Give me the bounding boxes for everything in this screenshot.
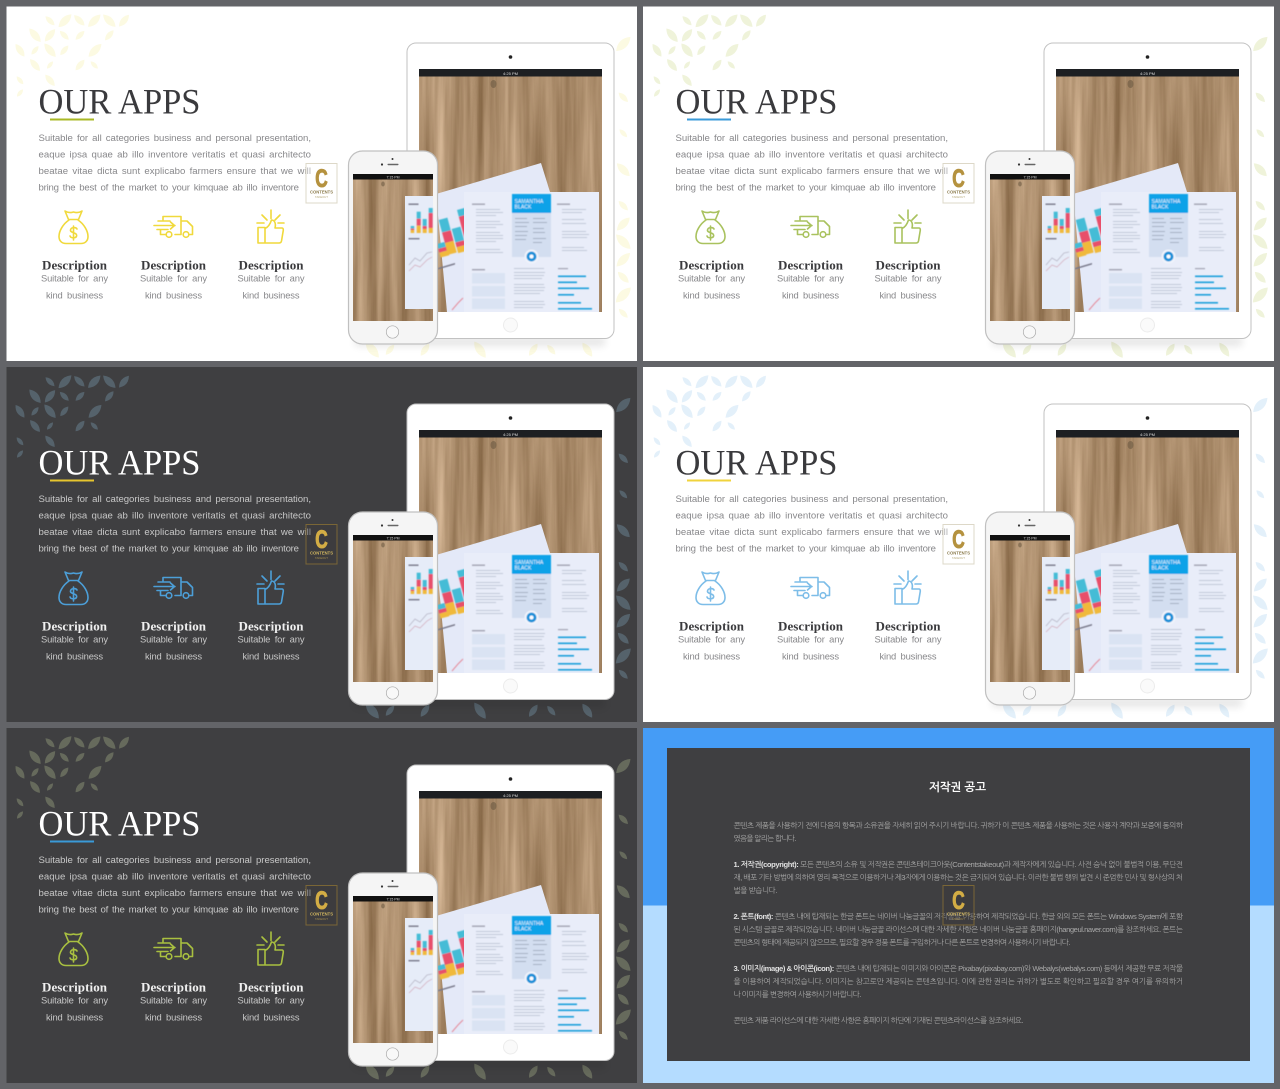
tablet and phone mockup bbox=[986, 404, 1251, 707]
body text: eaque ipsa quae ab illo inventore veritatis et quasi architecto bbox=[38, 150, 311, 160]
feature: description 3: Description bbox=[238, 258, 304, 272]
feature: description 3 bbox=[238, 618, 305, 662]
icon: money bag bbox=[696, 572, 725, 604]
feature: description 2: Description bbox=[141, 980, 207, 994]
feature: description 2: kind business bbox=[145, 650, 202, 662]
feature: description 1 bbox=[41, 258, 108, 300]
panel: copyright notice bbox=[643, 728, 1274, 1083]
icon: money bag bbox=[59, 572, 88, 604]
panel: blue dark slide bbox=[6, 367, 637, 722]
feature: description 1: kind business bbox=[46, 290, 103, 300]
feature: description 2 bbox=[777, 258, 844, 300]
feature: description 1: kind business bbox=[683, 650, 740, 662]
tablet and phone mockup bbox=[348, 765, 614, 1068]
body text: Suitable for all categories business and personal presentation, bbox=[676, 494, 948, 505]
notice clause: copyright bbox=[734, 860, 1183, 895]
feature: description 1 bbox=[678, 258, 745, 300]
feature: description 3 bbox=[238, 980, 305, 1022]
notice intro bbox=[734, 821, 1184, 843]
feature: description 3: Description bbox=[238, 980, 304, 994]
icon: thumbs up bbox=[257, 932, 284, 965]
watermark logo bbox=[306, 524, 337, 564]
panel: yellow light slide bbox=[6, 6, 637, 361]
notice clause: image and icon bbox=[734, 964, 1183, 999]
icon: delivery truck bbox=[154, 578, 192, 598]
feature: description 3: kind business bbox=[242, 650, 300, 662]
watermark logo bbox=[943, 524, 974, 564]
feature: description 1: Suitable for any bbox=[41, 994, 108, 1006]
leaf pattern bbox=[13, 373, 634, 721]
icon: delivery truck bbox=[154, 216, 192, 237]
leaf pattern bbox=[13, 12, 634, 360]
notice clause: copyright: 벌을 받습니다. bbox=[734, 886, 778, 895]
heading underline bbox=[50, 840, 94, 842]
feature: description 3: Suitable for any bbox=[238, 634, 305, 644]
watermark logo bbox=[306, 164, 337, 203]
leaf pattern bbox=[650, 373, 1271, 721]
body text: beatae vitae dicta sunt explicabo farmers ensure that we will bbox=[38, 166, 311, 177]
feature: description 1: Description bbox=[42, 258, 108, 272]
feature: description 2: kind business bbox=[782, 650, 839, 662]
feature: description 2: kind business bbox=[145, 1012, 202, 1022]
icon: thumbs up bbox=[257, 571, 284, 604]
feature: description 3 bbox=[874, 258, 942, 300]
tablet and phone mockup bbox=[348, 404, 614, 707]
body text: Suitable for all categories business and personal presentation, bbox=[38, 855, 311, 866]
feature: description 2 bbox=[140, 980, 207, 1022]
feature: description 2: kind business bbox=[782, 290, 839, 300]
feature: description 1 bbox=[41, 618, 108, 662]
feature: description 2: kind business bbox=[145, 290, 202, 300]
body text: eaque ipsa quae ab illo inventore veritatis et quasi architecto bbox=[38, 510, 311, 522]
feature: description 2: Suitable for any bbox=[140, 634, 207, 644]
feature: description 2 bbox=[140, 618, 207, 662]
heading: OUR APPS bbox=[676, 82, 838, 122]
feature: description 1: Suitable for any bbox=[41, 272, 108, 284]
body text: beatae vitae dicta sunt explicabo farmers ensure that we will bbox=[38, 888, 311, 899]
notice clause: font: 콘텐츠의 형태에 제공되지 않으므로, 필요할 경우 정품 폰트를 구입하거나 다른 폰트로 변경하여 사용하시기 바랍니다. bbox=[734, 938, 1070, 947]
feature: description 2: Suitable for any bbox=[140, 272, 207, 284]
panel: green light slide bbox=[643, 6, 1274, 361]
feature: description 1: Suitable for any bbox=[678, 634, 745, 644]
tablet and phone mockup bbox=[348, 43, 614, 346]
heading: OUR APPS bbox=[676, 442, 838, 482]
feature: description 1: Description bbox=[679, 258, 745, 272]
watermark logo bbox=[306, 886, 337, 925]
feature: description 3: Description bbox=[238, 618, 304, 634]
icon: money bag bbox=[59, 933, 88, 966]
notice title: 저작권 공고 bbox=[929, 781, 986, 794]
body text bbox=[676, 494, 948, 554]
icon: thumbs up bbox=[894, 210, 921, 243]
heading: OUR APPS bbox=[38, 82, 200, 122]
notice intro: 였음을 알리는 합니다. bbox=[734, 834, 796, 843]
feature: description 2: Suitable for any bbox=[140, 994, 207, 1006]
body text: bring the best of the market to your kimquae ab illo inventore bbox=[38, 544, 299, 554]
icon: delivery truck bbox=[791, 216, 830, 237]
notice clause: copyright: 1. 저작권(copyright): 모든 콘텐츠의 소유 및 저작권은 콘텐츠테이크아웃(Contentstakeout)과 제작자에게 있습니다. 사전 승낙 없이 불법적 이용, 무단전 bbox=[734, 860, 1183, 869]
body text: Suitable for all categories business and personal presentation, bbox=[38, 133, 311, 144]
feature: description 2: Description bbox=[778, 618, 844, 634]
heading underline bbox=[687, 480, 731, 482]
feature: description 3 bbox=[874, 618, 942, 662]
feature: description 3: kind business bbox=[242, 1012, 300, 1022]
body text bbox=[38, 133, 311, 194]
body text: Suitable for all categories business and personal presentation, bbox=[676, 133, 948, 144]
notice clause: font: 된 시스템 글꼴로 제작되었습니다. 네이버 나눔글꼴 라이선스에 대한 자세한 사항은 네이버 나눔글꼴 홈페이지(hangeul.naver.com)를 참조하세요. 폰트는 bbox=[734, 925, 1183, 934]
body text: beatae vitae dicta sunt explicabo farmers ensure that we will bbox=[676, 166, 948, 177]
leaf pattern bbox=[13, 734, 634, 1082]
body text: eaque ipsa quae ab illo inventore veritatis et quasi architecto bbox=[38, 872, 311, 882]
feature: description 3: Description bbox=[876, 618, 941, 634]
feature: description 3 bbox=[238, 258, 305, 300]
feature: description 1: kind business bbox=[683, 290, 740, 300]
panel: green dark slide bbox=[6, 728, 637, 1083]
notice clause: font bbox=[734, 912, 1184, 947]
body text bbox=[38, 494, 311, 554]
feature: description 1 bbox=[41, 980, 108, 1022]
feature: description 3: kind business bbox=[242, 290, 300, 300]
feature: description 3: Suitable for any bbox=[874, 634, 942, 644]
tablet and phone mockup bbox=[986, 43, 1251, 346]
leaf pattern bbox=[650, 12, 1271, 360]
body text: eaque ipsa quae ab illo inventore veritatis et quasi architecto bbox=[676, 510, 948, 522]
body text: beatae vitae dicta sunt explicabo farmers ensure that we will bbox=[38, 527, 311, 538]
heading underline bbox=[50, 118, 94, 120]
feature: description 2: Suitable for any bbox=[777, 634, 844, 644]
icon: money bag bbox=[59, 211, 88, 244]
body text: bring the best of the market to your kimquae ab illo inventore bbox=[676, 544, 936, 554]
watermark logo bbox=[943, 164, 974, 203]
body text: bring the best of the market to your kimquae ab illo inventore bbox=[676, 182, 936, 194]
notice intro: 콘텐츠 제품을 사용하기 전에 다음의 항목과 소유권을 자세히 읽어 주시기 바랍니다. 귀하가 이 콘텐츠 제품을 사용하는 것은 사용자 계약과 보증에 동의하 bbox=[734, 821, 1184, 830]
heading underline bbox=[50, 480, 94, 482]
icon: delivery truck bbox=[791, 578, 830, 598]
feature: description 2: Description bbox=[141, 258, 207, 272]
feature: description 2: Description bbox=[778, 258, 844, 272]
heading: OUR APPS bbox=[38, 442, 200, 482]
feature: description 1: kind business bbox=[46, 1012, 103, 1022]
feature: description 3: Suitable for any bbox=[238, 994, 305, 1006]
icon: thumbs up bbox=[257, 210, 284, 243]
feature: description 1 bbox=[678, 618, 745, 662]
feature: description 1: Description bbox=[42, 980, 108, 994]
notice footer: 콘텐츠 제품 라이선스에 대한 자세한 사항은 홈페이지 하단에 기재된 콘텐츠라이선스를 참조하세요. bbox=[734, 1016, 1024, 1025]
feature: description 2: Suitable for any bbox=[777, 272, 844, 284]
feature: description 1: Suitable for any bbox=[678, 272, 745, 284]
notice clause: font: 2. 폰트(font): 콘텐츠 내에 탑재되는 한글 폰트는 네이버 나눔글꼴의 저작물을 이용하여 제작되었습니다. 한글 외의 모든 폰트는 Windows System에 포함 bbox=[734, 912, 1184, 921]
icon: thumbs up bbox=[894, 571, 921, 604]
feature: description 3: Suitable for any bbox=[874, 272, 942, 284]
icon: money bag bbox=[696, 211, 725, 244]
feature: description 1: Suitable for any bbox=[41, 634, 108, 644]
feature: description 3: Description bbox=[876, 258, 941, 272]
feature: description 1: Description bbox=[42, 618, 108, 634]
feature: description 3: Suitable for any bbox=[238, 272, 305, 284]
feature: description 2 bbox=[777, 618, 844, 662]
body text bbox=[38, 855, 311, 916]
notice clause: image and icon: 나 이미지를 변경하여 사용하시기 바랍니다. bbox=[734, 990, 862, 999]
heading: OUR APPS bbox=[38, 804, 200, 844]
body text: beatae vitae dicta sunt explicabo farmers ensure that we will bbox=[676, 527, 948, 538]
icon: delivery truck bbox=[154, 938, 192, 959]
body text bbox=[676, 133, 948, 194]
body text: bring the best of the market to your kimquae ab illo inventore bbox=[38, 182, 299, 194]
notice clause: copyright: 재, 배포 기타 방법에 의하여 영리 목적으로 이용하거나 제3자에게 이용하는 것은 금지되어 있습니다. 이러한 불법 행위 발견 시 준엄한 민사 및 형사상의 처 bbox=[734, 873, 1183, 882]
feature: description 1: kind business bbox=[46, 650, 103, 662]
body text: bring the best of the market to your kimquae ab illo inventore bbox=[38, 904, 299, 916]
feature: description 3: kind business bbox=[880, 650, 937, 662]
panel: light blue slide bbox=[643, 367, 1274, 722]
watermark logo bbox=[943, 886, 974, 925]
heading underline bbox=[687, 118, 731, 120]
feature: description 2 bbox=[140, 258, 207, 300]
notice clause: image and icon: 을 이용하여 제작되었습니다. 이미지는 참고로만 제공되는 콘텐츠입니다. 이에 관한 권리는 귀하가 별도로 확인하고 필요할 경우 여기를 유의하거 bbox=[734, 977, 1183, 986]
notice clause: image and icon: 3. 이미지(image) & 아이콘(icon): 콘텐츠 내에 탑재되는 이미지와 아이콘은 Pixabay(pixabay.com)와 Webalys(webalys.com) 등에서 제공한 무료 저작물 bbox=[734, 964, 1183, 973]
body text: eaque ipsa quae ab illo inventore veritatis et quasi architecto bbox=[676, 150, 948, 160]
body text: Suitable for all categories business and personal presentation, bbox=[38, 494, 311, 505]
feature: description 3: kind business bbox=[880, 290, 937, 300]
feature: description 1: Description bbox=[679, 618, 745, 634]
feature: description 2: Description bbox=[141, 618, 207, 634]
